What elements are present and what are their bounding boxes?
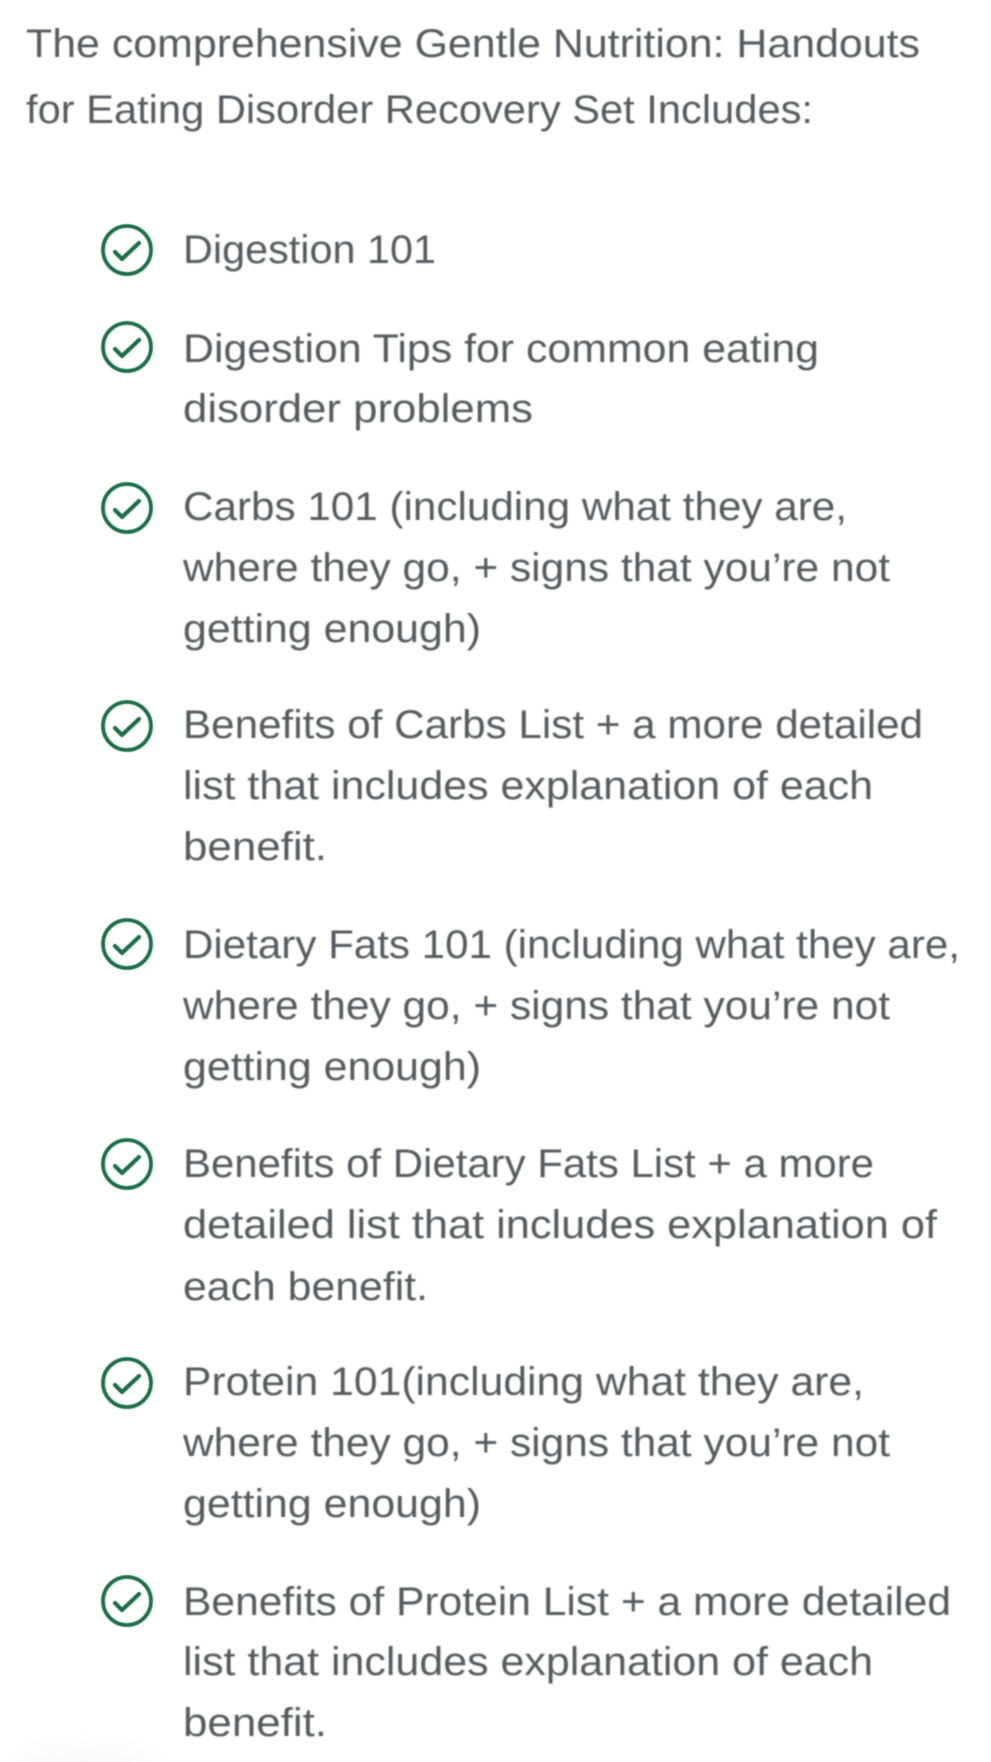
list item: Benefits of Dietary Fats <box>103 1140 938 1309</box>
list item: Protein 101: getting enough) <box>183 1482 481 1526</box>
list item: Benefits of Protein <box>103 1577 951 1745</box>
icon: check circle <box>103 920 151 968</box>
list item: Carbs 101: where they go, + signs that you’re not <box>182 546 890 590</box>
icon: check circle <box>103 1359 151 1407</box>
list item: Dietary Fats 101: getting enough) <box>183 1045 481 1089</box>
icon: check circle <box>103 1577 151 1625</box>
list item: Protein 101 <box>103 1359 890 1526</box>
list item: Benefits of Carbs: Benefits of Carbs List + a more detailed <box>183 703 923 747</box>
icon: check circle <box>103 323 151 371</box>
icon: check circle <box>103 484 151 532</box>
list item: Dietary Fats 101: Dietary Fats 101 (including what they are, <box>183 923 960 967</box>
list item: Dietary Fats 101 <box>103 920 960 1089</box>
list item: Benefits of Dietary Fats: Benefits of Dietary Fats List + a more <box>183 1142 874 1186</box>
list item: Benefits of Dietary Fats: each benefit. <box>183 1265 428 1309</box>
list item: Protein 101: Protein 101(including what they are, <box>183 1360 864 1404</box>
list item: Digestion Tips: Digestion Tips for common eating <box>183 327 819 371</box>
list item: Carbs 101: getting enough) <box>183 607 481 651</box>
list item: Carbs 101: Carbs 101 (including what they are, <box>183 485 847 529</box>
list item: Protein 101: where they go, + signs that you’re not <box>182 1421 890 1465</box>
icon: check circle <box>103 1140 151 1188</box>
list item: Benefits of Carbs <box>103 702 923 869</box>
list item: Benefits of Carbs: list that includes explanation of each <box>183 764 873 808</box>
list item: Digestion Tips <box>103 323 819 431</box>
list item: Benefits of Protein: Benefits of Protein List + a more detailed <box>183 1580 951 1624</box>
heading: The comprehensive Gentle Nutrition: Handouts <box>26 22 920 66</box>
list item: Digestion 101: Digestion 101 <box>183 228 436 272</box>
list item: Benefits of Carbs: benefit. <box>183 825 327 869</box>
heading <box>26 22 920 132</box>
list item: Carbs 101 <box>103 484 890 651</box>
heading: for Eating Disorder Recovery Set Includes: <box>26 88 813 132</box>
icon: check circle <box>103 226 151 274</box>
list item: Benefits of Protein: list that includes explanation of each <box>183 1640 873 1684</box>
list item: Dietary Fats 101: where they go, + signs that you’re not <box>182 984 890 1028</box>
list item: Digestion Tips: disorder problems <box>183 387 533 431</box>
list item: Digestion 101 <box>103 226 436 274</box>
list item: Benefits of Protein: benefit. <box>183 1701 327 1745</box>
icon: check circle <box>103 702 151 750</box>
list item: Benefits of Dietary Fats: detailed list that includes explanation of <box>183 1203 938 1247</box>
